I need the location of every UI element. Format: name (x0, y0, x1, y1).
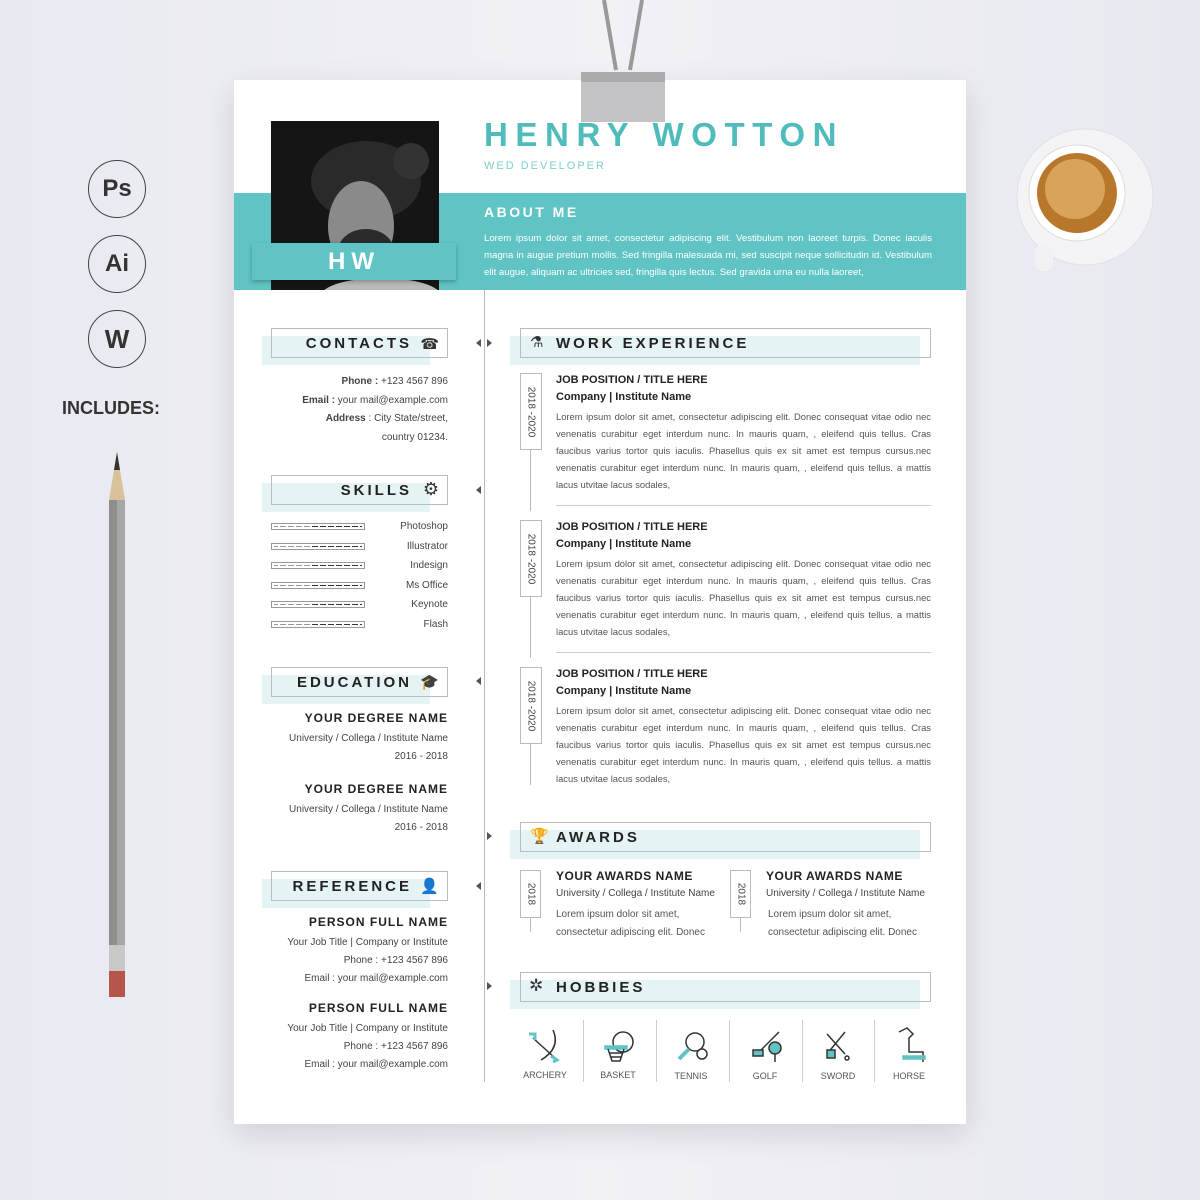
heading: reference (262, 871, 448, 908)
monogram band (252, 243, 456, 280)
hobbies icons: HORSE (893, 1071, 925, 1081)
heading: education: 🎓 (420, 674, 439, 691)
award 1: Lorem ipsum dolor sit amet, (556, 909, 679, 920)
work text 3: Lorem ipsum dolor sit amet, consectetur adipiscing elit. Donec consequat vitae odio nec (556, 705, 931, 716)
heading: contacts: CONTACTS (306, 335, 412, 352)
work text 3: lacus utvitae lacus sodales, (556, 773, 670, 784)
icon: Ps circle (88, 160, 146, 218)
work entry 1: JOB POSITION / TITLE HERE (556, 374, 708, 386)
reference entries: Email : your mail@example.com (304, 973, 448, 984)
award 1: 2018 (525, 883, 536, 905)
work text 1: lacus utvitae lacus sodales, (556, 479, 670, 490)
education entries: YOUR DEGREE NAME (305, 711, 448, 725)
work text 1: Lorem ipsum dolor sit amet, consectetur adipiscing elit. Donec consequat vitae odio nec (556, 411, 931, 422)
education entries: 2016 - 2018 (395, 822, 448, 833)
heading: work experience: WORK EXPERIENCE (556, 335, 749, 352)
heading: contacts (262, 328, 448, 365)
education entries: University / Collega / Institute Name (289, 733, 448, 744)
icon: Ai circle: Ai (105, 250, 129, 277)
award 2: YOUR AWARDS NAME (766, 869, 903, 883)
heading: contacts: ☎ (420, 336, 439, 353)
reference entries: PERSON FULL NAME (309, 1001, 448, 1015)
pencil (109, 452, 125, 997)
award 2: consectetur adipiscing elit. Donec (768, 927, 917, 938)
hobbies icons: GOLF (753, 1071, 777, 1081)
education entries: YOUR DEGREE NAME (305, 782, 448, 796)
work text 2: venenatis curabitur eget interdum nunc. In mauris quam, , eleifend quis tellus. a mattis (556, 609, 931, 620)
work text 1: venenatis curabitur eget interdum nunc. In mauris quam, , eleifend quis tellus. Cras (556, 428, 931, 439)
heading: awards (510, 822, 931, 859)
heading: work experience (510, 328, 931, 365)
reference entries: Your Job Title | Company or Institute (287, 1023, 448, 1034)
monogram band: HW (328, 248, 380, 275)
heading: education (262, 667, 448, 704)
education entries: 2016 - 2018 (395, 751, 448, 762)
work text 2 (556, 558, 931, 637)
work text 3 (556, 705, 931, 784)
skills list (271, 521, 448, 630)
work entry 2: JOB POSITION / TITLE HERE (556, 521, 708, 533)
work entry 2: Company | Institute Name (556, 538, 691, 550)
work entry 2: 2018 -2020 (526, 533, 536, 584)
award 1: consectetur adipiscing elit. Donec (556, 927, 705, 938)
skills list: Flash (424, 619, 448, 630)
award 1 (520, 869, 715, 938)
about me: Lorem ipsum dolor sit amet, consectetur adipiscing elit. Vestibulum non laoreet turpis. Donec iaculis magna in augue pretium mollis. Sed fringilla malesuada mi, sed suscipit neque sollicitudin id. Vestibulum elit augue, aliquam ac ultricies sed, fringilla quis lectus. Sed gravida urna eu nulla laoreet, (484, 233, 932, 278)
skills list: Photoshop (400, 521, 448, 532)
contacts text (302, 376, 448, 442)
name: HENRY WOTTON (484, 116, 844, 153)
work entry 3: 2018 -2020 (526, 680, 536, 731)
heading: reference: 👤 (420, 878, 439, 895)
about me (484, 204, 932, 278)
contacts text: country 01234. (382, 432, 448, 442)
reference entries: Phone : +123 4567 896 (344, 1041, 448, 1052)
heading: education: EDUCATION (297, 674, 412, 691)
work text 1 (556, 411, 931, 490)
award 1: University / Collega / Institute Name (556, 888, 715, 899)
hobbies icons (523, 1020, 926, 1082)
contacts text: Phone : +123 4567 896 (342, 376, 448, 387)
award 2: 2018 (735, 883, 746, 905)
heading: hobbies (510, 972, 931, 1009)
skills list: Keynote (411, 599, 448, 610)
work text 3: venenatis curabitur eget interdum nunc. In mauris quam, , eleifend quis tellus. Cras (556, 722, 931, 733)
paper (234, 80, 966, 1124)
education entries (289, 711, 448, 833)
reference entries: Phone : +123 4567 896 (344, 955, 448, 966)
work entry 1: 2018 -2020 (526, 386, 536, 437)
teal header band (234, 193, 966, 290)
heading: skills: SKILLS (341, 482, 412, 499)
hobbies icons: SWORD (821, 1071, 855, 1081)
work text 3: venenatis curabitur eget interdum nunc. In mauris quam, , eleifend quis tellus. a mattis (556, 756, 931, 767)
binder clip (581, 0, 665, 122)
work entry 2 (520, 520, 931, 658)
work text 2: Lorem ipsum dolor sit amet, consectetur adipiscing elit. Donec consequat vitae odio nec (556, 558, 931, 569)
heading: skills (262, 475, 448, 512)
skills list: Indesign (410, 560, 448, 571)
contacts text: Address : City State/street, (326, 413, 448, 424)
work entry 1: Company | Institute Name (556, 391, 691, 403)
work text 1: faucibus varius tortor quis iaculis. Phasellus quis ex sit amet est tempus cursus.nec (556, 445, 931, 456)
reference entries: PERSON FULL NAME (309, 915, 448, 929)
skills list: Ms Office (406, 580, 448, 591)
icon: Ai circle (88, 235, 146, 293)
work text 3: faucibus varius tortor quis iaculis. Phasellus quis ex sit amet est tempus cursus.nec (556, 739, 931, 750)
photo (271, 121, 439, 290)
award 2: Lorem ipsum dolor sit amet, (768, 909, 891, 920)
job title: WED DEVELOPER (484, 160, 606, 172)
award 2 (730, 869, 925, 938)
hobbies icons: TENNIS (674, 1071, 708, 1081)
reference entries: Your Job Title | Company or Institute (287, 937, 448, 948)
reference entries (287, 915, 448, 1070)
work text 2: faucibus varius tortor quis iaculis. Phasellus quis ex sit amet est tempus cursus.nec (556, 592, 931, 603)
hobbies icons: BASKET (600, 1070, 636, 1080)
hobbies icons: ARCHERY (523, 1070, 567, 1080)
timeline (476, 290, 492, 1082)
award 2: University / Collega / Institute Name (766, 888, 925, 899)
heading: awards: AWARDS (556, 829, 640, 846)
icon: W circle: W (105, 324, 129, 354)
education entries: University / Collega / Institute Name (289, 804, 448, 815)
contacts text: Email : your mail@example.com (302, 394, 448, 406)
work text 2: venenatis curabitur eget interdum nunc. In mauris quam, , eleifend quis tellus. Cras (556, 575, 931, 586)
heading: hobbies: HOBBIES (556, 979, 645, 996)
coffee cup (1016, 128, 1154, 266)
work text 2: lacus utvitae lacus sodales, (556, 626, 670, 637)
heading: work experience: ⚗ (530, 334, 543, 351)
skills list: Illustrator (407, 541, 448, 552)
work entry 1 (520, 373, 931, 511)
includes label: INCLUDES: (62, 398, 160, 418)
work text 1: venenatis curabitur eget interdum nunc. In mauris quam, , eleifend quis tellus. a mattis (556, 462, 931, 473)
work entry 3: Company | Institute Name (556, 685, 691, 697)
about me: ABOUT ME (484, 204, 579, 220)
work entry 3 (520, 667, 708, 785)
heading: skills: ⚙ (423, 479, 439, 499)
work entry 3: JOB POSITION / TITLE HERE (556, 668, 708, 680)
heading: hobbies: ✲ (529, 976, 543, 995)
heading: reference: REFERENCE (292, 878, 412, 895)
award 1: YOUR AWARDS NAME (556, 869, 693, 883)
icon: Ps circle: Ps (102, 175, 132, 202)
reference entries: Email : your mail@example.com (304, 1059, 448, 1070)
heading: awards: 🏆 (530, 828, 549, 845)
icon: W circle (88, 310, 146, 368)
